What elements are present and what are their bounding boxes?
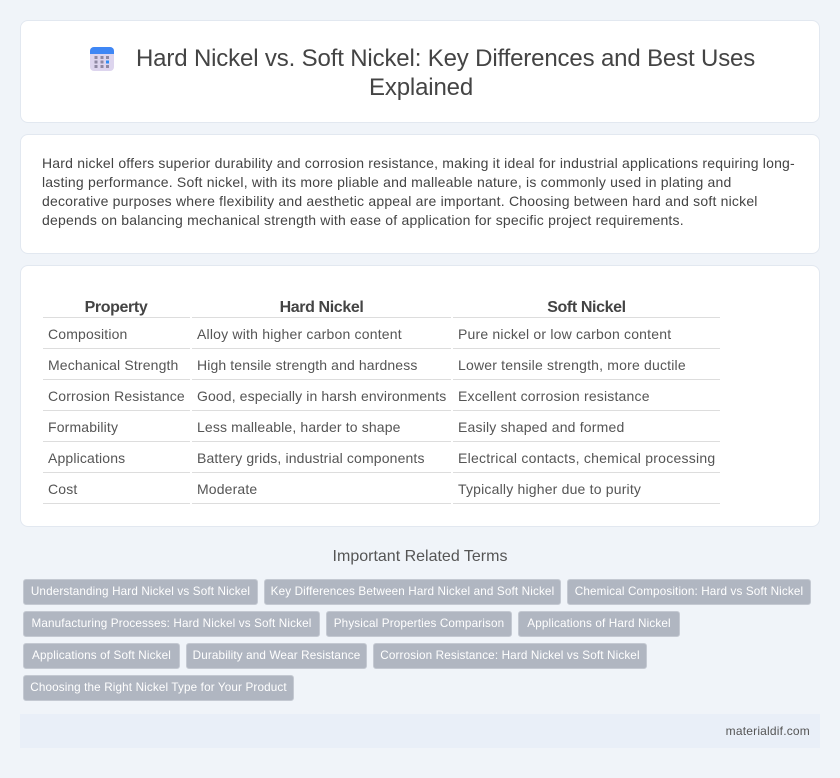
related term tags: Corrosion Resistance: Hard Nickel vs Soft Nickel <box>380 649 640 662</box>
table rows: Corrosion Resistance <box>48 388 185 404</box>
comparison table: Hard Nickel <box>280 299 363 316</box>
table rows: Moderate <box>197 481 257 497</box>
table rows: Battery grids, industrial components <box>197 450 425 466</box>
table rows: Excellent corrosion resistance <box>458 388 650 404</box>
table rows: Electrical contacts, chemical processing <box>458 450 715 466</box>
comparison table: Property <box>85 299 147 316</box>
table rows: Formability <box>48 419 118 435</box>
table rows: Pure nickel or low carbon content <box>458 326 671 342</box>
comparison table: Soft Nickel <box>547 299 626 316</box>
panel: comparison table <box>20 265 820 527</box>
table rows: Easily shaped and formed <box>458 419 624 435</box>
title <box>136 45 755 101</box>
table rows: Good, especially in harsh environments <box>197 388 446 404</box>
table rows: Typically higher due to purity <box>458 481 641 497</box>
related term tags: Applications of Soft Nickel <box>32 649 171 662</box>
footer bar <box>20 714 820 748</box>
table rows: Less malleable, harder to shape <box>197 419 401 435</box>
column headings <box>85 299 626 316</box>
related term tags: Manufacturing Processes: Hard Nickel vs Soft Nickel <box>32 617 311 630</box>
header panel <box>20 20 820 123</box>
intro paragraph: Hard nickel offers superior durability and corrosion resistance, making it ideal for industrial applications requiring long- <box>42 155 795 171</box>
table rows: Alloy with higher carbon content <box>197 326 402 342</box>
related term tags: Durability and Wear Resistance <box>193 649 360 662</box>
table rows: Mechanical Strength <box>48 357 178 373</box>
table rows: Composition <box>48 326 127 342</box>
intro paragraph: depends on balancing mechanical strength with ease of application for specific project requirements. <box>42 212 684 228</box>
title: Hard Nickel vs. Soft Nickel: Key Differences and Best Uses <box>136 45 755 72</box>
comparison table <box>43 299 720 504</box>
table rows: Lower tensile strength, more ductile <box>458 357 686 373</box>
related term tags: Chemical Composition: Hard vs Soft Nickel <box>575 585 803 598</box>
related term tags: Physical Properties Comparison <box>334 617 504 630</box>
table rows <box>43 317 720 504</box>
footer source text: materialdif.com <box>726 724 810 738</box>
intro paragraph: decorative purposes where flexibility and aesthetic appeal are important. Choosing between hard and soft nickel <box>42 193 758 209</box>
intro paragraph: lasting performance. Soft nickel, with its more pliable and malleable nature, is commonly used in plating and <box>42 174 731 190</box>
panel: introduction <box>20 134 820 254</box>
related term tags <box>23 579 811 701</box>
icon: calendar <box>90 47 114 71</box>
related terms heading: Important Related Terms <box>333 548 507 565</box>
title: Explained <box>369 74 473 101</box>
intro paragraph <box>42 155 795 228</box>
related term tags: Key Differences Between Hard Nickel and Soft Nickel <box>271 585 554 598</box>
table rows: High tensile strength and hardness <box>197 357 417 373</box>
table rows: Cost <box>48 481 77 497</box>
table rows: Applications <box>48 450 125 466</box>
related term tags: Understanding Hard Nickel vs Soft Nickel <box>31 585 250 598</box>
related term tags: Applications of Hard Nickel <box>527 617 671 630</box>
related term tags: Choosing the Right Nickel Type for Your Product <box>30 681 287 694</box>
